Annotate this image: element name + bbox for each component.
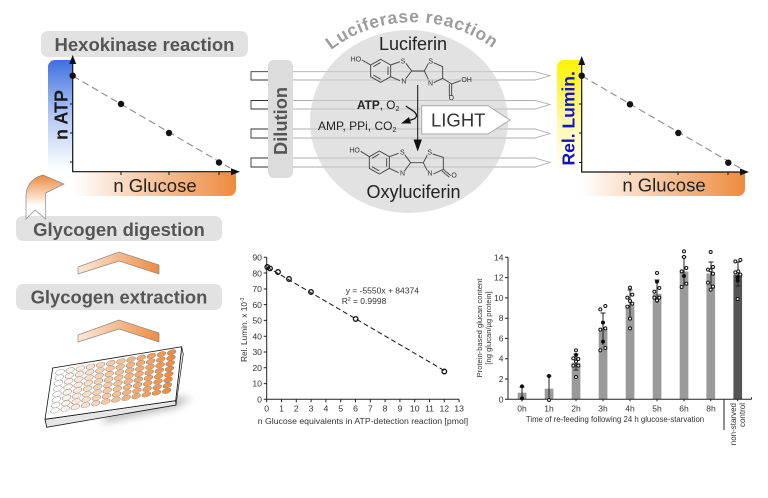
heading: Hexokinase reaction: Hexokinase reaction (55, 34, 234, 55)
x tick labels: 5 (338, 404, 343, 414)
arrow: ATP to AMP side arrow (401, 106, 416, 124)
x tick labels: 2 (294, 404, 299, 414)
x tick labels: 12 (439, 404, 449, 414)
label: ATP, O2: 2 (395, 106, 399, 113)
fit line (267, 267, 445, 371)
x tick labels: 9 (397, 404, 402, 414)
structure: luciferin molecule: N (428, 80, 433, 87)
y tick labels: 90 (252, 252, 262, 262)
y tick labels (494, 252, 504, 404)
chart: glucan content bar chart (475, 250, 752, 445)
structure: luciferin molecule: O (449, 95, 455, 102)
equation: y = -5550x + 84374 (346, 286, 419, 296)
structure: oxyluciferin molecule: O (451, 173, 457, 180)
heading: Luciferase reaction curved title: Luciferase reaction (325, 12, 496, 50)
structure: luciferin molecule: S (428, 58, 433, 65)
x tick labels: 8 (383, 404, 388, 414)
y tick labels: 70 (252, 284, 262, 294)
label: Dilution (268, 60, 293, 178)
control label: non-starved (729, 403, 738, 445)
x tick labels: 11 (425, 404, 434, 414)
y axis title: Rel. Lumin. x 10 (239, 302, 249, 362)
error bars (520, 257, 740, 399)
x tick labels (517, 404, 716, 414)
structure: oxyluciferin molecule: S (427, 149, 432, 156)
y tick labels: 50 (252, 316, 262, 326)
arrows: four dilution lanes (251, 72, 550, 167)
panel: luciferase reaction circle (310, 30, 508, 213)
arrow: curved orange arrow from digestion to hexokinase (26, 175, 64, 219)
x tick labels (264, 404, 464, 414)
x tick labels: 1h (544, 404, 554, 414)
y tick labels: 2 (499, 374, 504, 384)
icon: 96-well plate (45, 347, 192, 427)
label: Luciferin: Luciferin (379, 34, 447, 54)
label: AMP, PPi, CO2: AMP, PPi, CO (318, 119, 392, 133)
label: AMP, PPi, CO2: 2 (392, 127, 396, 134)
y tick labels: 20 (252, 363, 262, 373)
x tick labels: 6 (353, 404, 358, 414)
data points (520, 250, 742, 401)
y tick labels: 40 (252, 331, 262, 341)
label: Dilution: Dilution (270, 87, 291, 155)
x tick labels: 8h (706, 404, 716, 414)
chart: n ATP versus n Glucose schematic (48, 55, 240, 196)
x tick labels: 4h (625, 404, 635, 414)
r squared: R (342, 296, 348, 306)
y tick labels: 0 (257, 394, 262, 404)
x tick labels: 0h (517, 404, 527, 414)
x tick labels: 4 (323, 404, 328, 414)
y axis label: n ATP: n ATP (52, 90, 72, 140)
heading: Glycogen extraction (16, 284, 222, 310)
structure: luciferin molecule: OH (461, 77, 472, 84)
data points (265, 265, 447, 374)
x tick labels: 13 (454, 404, 464, 414)
structure: luciferin molecule: S (401, 58, 406, 65)
x axis label: n Glucose (582, 172, 745, 196)
x axis title: n Glucose equivalents in ATP-detection reaction [pmol] (258, 416, 468, 426)
y tick labels: 6 (499, 333, 504, 343)
chart: standard curve of luminescence (239, 252, 468, 426)
heading: Glycogen digestion: Glycogen digestion (33, 219, 205, 240)
axes and ticks (505, 257, 752, 430)
axes and ticks (264, 257, 459, 402)
label: ATP, O2: ATP, O (357, 98, 395, 112)
bars (518, 272, 742, 399)
y tick labels: 80 (252, 268, 262, 278)
y tick labels: 8 (499, 313, 504, 323)
y tick labels: 10 (252, 379, 262, 389)
structure: oxyluciferin molecule: S (400, 150, 405, 157)
y axis label: Rel. Lumin.: Rel. Lumin. (558, 71, 578, 166)
structure: luciferin molecule: HO (351, 56, 362, 63)
y tick labels: 60 (252, 300, 262, 310)
y tick labels: 14 (494, 252, 504, 262)
structure: luciferin molecule: N (401, 78, 406, 85)
heading: Glycogen extraction: Glycogen extraction (31, 286, 207, 308)
control label: control (738, 403, 747, 427)
y tick labels (252, 252, 262, 404)
x tick labels: 7 (368, 404, 373, 414)
y tick labels: 12 (494, 273, 504, 283)
y tick labels: 10 (494, 293, 504, 303)
x tick labels: 0 (264, 404, 269, 414)
arrow: LIGHT (422, 106, 510, 134)
r squared: 2 (348, 297, 351, 303)
arrow: upper chevron (78, 252, 159, 274)
y axis title: Protein-based glucan content (475, 278, 484, 377)
x axis label: n Glucose: n Glucose (622, 175, 706, 196)
x tick labels: 3h (598, 404, 608, 414)
structure: oxyluciferin molecule: HO (349, 148, 360, 155)
y axis title: [ng glucan/µg protein] (484, 291, 493, 365)
y axis label: n ATP (48, 60, 72, 171)
x tick labels: 10 (410, 404, 420, 414)
x tick labels: 5h (652, 404, 662, 414)
x tick labels: 3 (309, 404, 314, 414)
y tick labels: 4 (499, 354, 504, 364)
r squared: = 0.9998 (351, 296, 387, 306)
label: Oxyluciferin: Oxyluciferin (366, 182, 461, 202)
arrow: main reaction arrow (414, 85, 421, 150)
x tick labels: 1 (279, 404, 284, 414)
y axis title: -3 (240, 297, 246, 302)
x tick labels: 6h (679, 404, 689, 414)
x axis label: n Glucose (73, 172, 236, 196)
structure: oxyluciferin molecule (349, 148, 457, 180)
arrow: LIGHT: LIGHT (431, 110, 485, 130)
arrow: lower chevron (78, 320, 159, 342)
y tick labels: 30 (252, 347, 262, 357)
structure: oxyluciferin molecule: N (427, 170, 432, 177)
chart: relative luminescence versus n Glucose schematic (557, 56, 749, 196)
x axis title: Time of re-feeding following 24 h glucose-starvation (526, 415, 704, 424)
x tick labels: 2h (571, 404, 581, 414)
structure: oxyluciferin molecule: N (400, 171, 405, 178)
structure: luciferin molecule (351, 56, 472, 102)
x axis label: n Glucose: n Glucose (113, 175, 197, 196)
y tick labels: 0 (499, 394, 504, 404)
